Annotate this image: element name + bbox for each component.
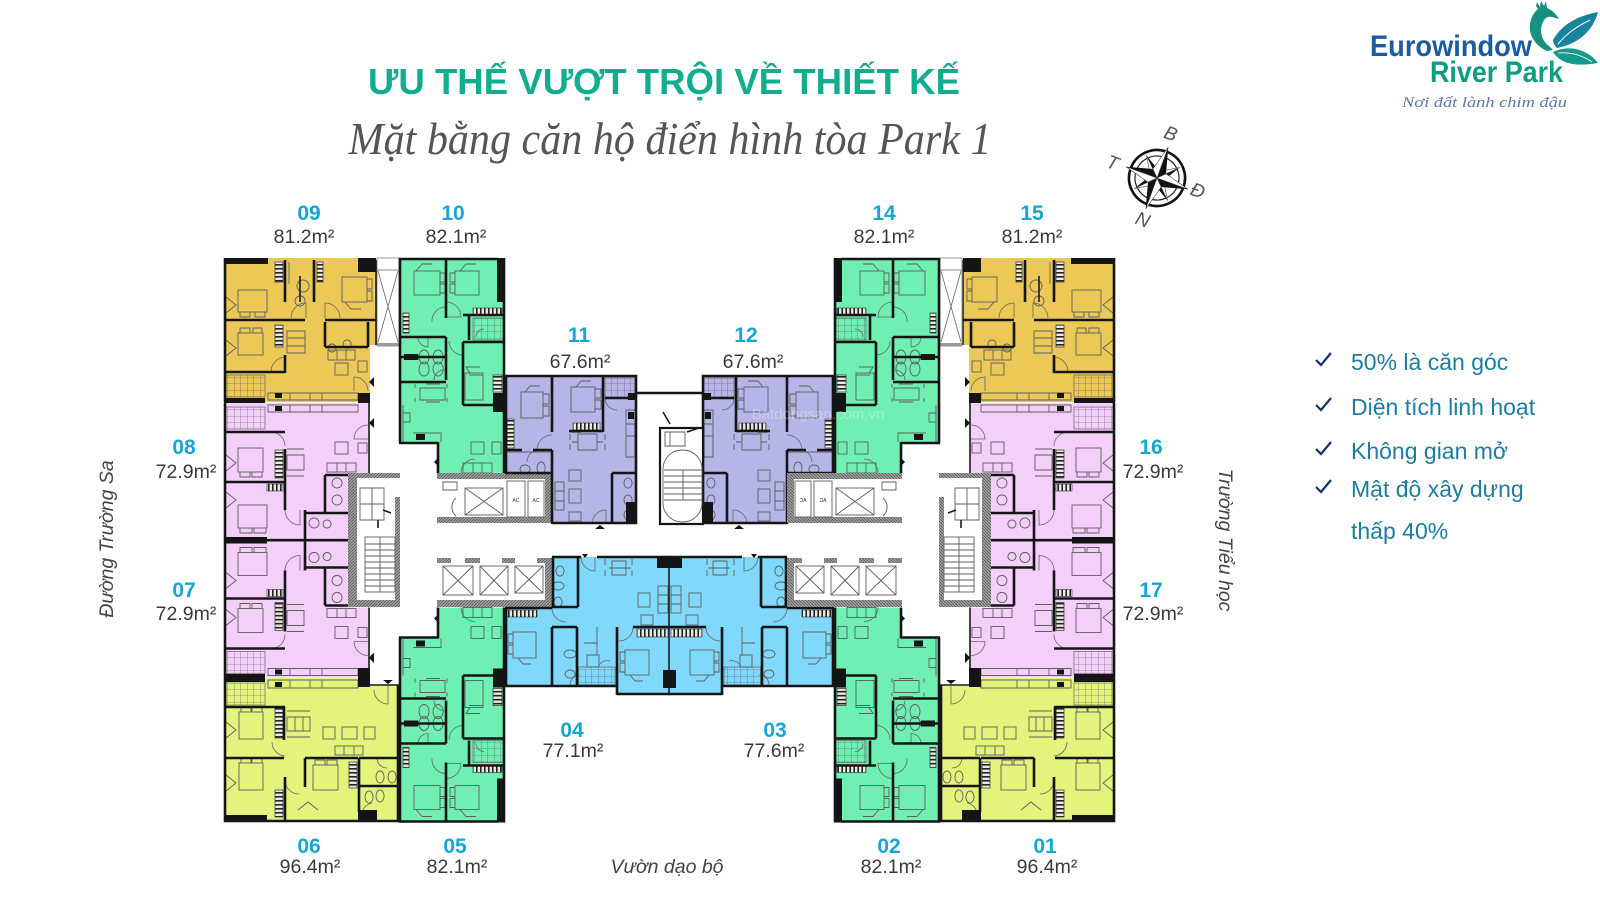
label garden walkway: Vườn dạo bộ <box>610 856 724 878</box>
label unit 03: 03 <box>763 719 787 742</box>
floor plan <box>224 258 1115 822</box>
service shaft left <box>377 258 399 346</box>
unit 03 blue <box>669 554 834 695</box>
label unit 15: 81.2m² <box>1002 226 1063 248</box>
label unit 11: 67.6m² <box>550 351 611 373</box>
unit 15 yellow <box>963 258 1115 405</box>
label unit 04: 04 <box>560 719 584 742</box>
unit 07 purple <box>224 540 374 678</box>
bullet 3: Không gian mở <box>1351 438 1508 464</box>
label unit 10: 10 <box>441 202 465 225</box>
label Duong Truong Sa: Đường Trường Sa <box>96 460 118 618</box>
label unit 17 <box>1123 579 1184 625</box>
bullet 4 <box>1316 476 1524 544</box>
label unit 07: 07 <box>172 579 196 602</box>
logo wordmark Eurowindow: Eurowindow <box>1370 30 1533 63</box>
compass letter D: Đ <box>1187 179 1208 204</box>
label unit 06 <box>280 835 341 878</box>
stair core left <box>348 473 400 607</box>
label unit 03: 77.6m² <box>744 740 805 762</box>
label unit 08 <box>156 436 217 483</box>
label unit 01: 01 <box>1033 835 1057 858</box>
label unit 01: 96.4m² <box>1017 856 1078 878</box>
label unit 02: 02 <box>877 835 901 858</box>
label unit 05: 82.1m² <box>427 856 488 878</box>
logo: Eurowindow River Park <box>1370 1 1598 111</box>
label unit 17: 17 <box>1139 579 1163 602</box>
unit 02 green <box>834 608 940 822</box>
label unit 09 <box>274 202 335 248</box>
unit 05 green <box>399 608 505 822</box>
elevator core bottom <box>437 558 552 607</box>
label unit 10 <box>426 202 487 248</box>
AC shaft labels <box>513 498 540 504</box>
label unit 14: 82.1m² <box>854 226 915 248</box>
elevator core top <box>437 473 552 523</box>
AC shaft labels: AC <box>513 498 520 504</box>
connector wall <box>637 392 703 394</box>
unit 04 blue <box>505 554 670 695</box>
label unit 04 <box>543 719 604 762</box>
icon: peacock <box>1530 1 1598 65</box>
label unit 14 <box>854 202 915 248</box>
label unit 06: 96.4m² <box>280 856 341 878</box>
unit 10 green <box>399 258 505 473</box>
label unit 08: 08 <box>172 436 196 459</box>
feature list <box>1316 349 1536 544</box>
unit 12 lavender <box>702 375 834 529</box>
subtitle: Mặt bằng căn hộ điển hình tòa Park 1 <box>348 113 992 164</box>
label Truong Tieu hoc: Trường Tiểu học <box>1214 469 1236 612</box>
label unit 01 <box>1017 835 1078 878</box>
label unit 09: 81.2m² <box>274 226 335 248</box>
compass <box>1103 122 1208 233</box>
compass letter T: T <box>1103 152 1123 176</box>
logo slogan: Nơi đất lành chim đậu <box>1401 95 1567 111</box>
bullet 4: thấp 40% <box>1351 518 1448 544</box>
bullet 4: Mật độ xây dựng <box>1351 476 1524 502</box>
compass letter B: B <box>1161 122 1180 147</box>
label unit 11: 11 <box>568 324 590 347</box>
label unit 15: 15 <box>1020 202 1044 225</box>
compass letter N: N <box>1132 208 1153 233</box>
label unit 08: 72.9m² <box>156 461 217 483</box>
stair core right <box>939 473 991 607</box>
label unit 15 <box>1002 202 1063 248</box>
AC shaft labels: AC <box>533 498 540 504</box>
label unit 07 <box>156 579 217 625</box>
unit 11 lavender <box>505 375 637 529</box>
label unit 07: 72.9m² <box>156 603 217 625</box>
label unit 09: 09 <box>297 202 321 225</box>
elevator core top right <box>787 473 902 523</box>
compass rose <box>1115 136 1199 220</box>
title: ƯU THẾ VƯỢT TRỘI VỀ THIẾT KẾ <box>368 60 960 102</box>
label unit 12: 67.6m² <box>723 351 784 373</box>
service shaft right <box>940 258 962 346</box>
label unit 17: 72.9m² <box>1123 603 1184 625</box>
label unit 14: 14 <box>872 202 896 225</box>
label unit 12 <box>723 324 784 373</box>
unit 17 purple <box>965 540 1115 678</box>
central stair <box>660 412 703 524</box>
unit 08 purple <box>224 403 374 541</box>
label unit 04: 77.1m² <box>543 740 604 762</box>
label unit 16 <box>1123 436 1184 483</box>
label unit 06: 06 <box>297 835 321 858</box>
bullet 2: Diện tích linh hoạt <box>1351 394 1536 420</box>
label unit 10: 82.1m² <box>426 226 487 248</box>
unit 16 purple <box>965 403 1115 541</box>
unit 01 lime <box>940 653 1115 822</box>
unit 09 yellow <box>224 258 376 405</box>
label unit 05: 05 <box>443 835 467 858</box>
watermark: Batdongsan.com.vn <box>752 406 884 423</box>
unit 06 lime <box>224 653 399 822</box>
label unit 16: 16 <box>1139 436 1163 459</box>
label unit 02: 82.1m² <box>861 856 922 878</box>
label unit 12: 12 <box>734 324 758 347</box>
label unit 16: 72.9m² <box>1123 461 1184 483</box>
label unit 03 <box>744 719 805 762</box>
label unit 05 <box>427 835 488 878</box>
bullet 1: 50% là căn góc <box>1351 349 1508 375</box>
elevator core bottom right <box>787 558 902 607</box>
label unit 11 <box>550 324 611 373</box>
logo wordmark River Park: River Park <box>1430 56 1563 89</box>
unit 14 green <box>834 258 940 473</box>
label unit 02 <box>861 835 922 878</box>
